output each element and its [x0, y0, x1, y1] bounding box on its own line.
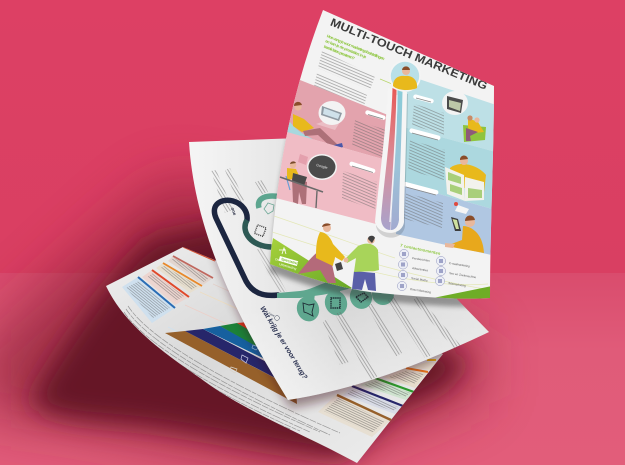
- small step label: Fase: [268, 311, 276, 318]
- right man: [344, 236, 379, 291]
- contact moments list: E-mailmarketing: [449, 261, 470, 268]
- thermometer: inner bore: [390, 95, 397, 222]
- logo: De: [275, 257, 280, 262]
- contact moments list: Persberichten: [412, 256, 430, 263]
- icon: person with tablet: [445, 215, 484, 253]
- lobe icons: [303, 293, 368, 316]
- logo: [275, 248, 299, 271]
- shadow under papers: [0, 180, 480, 465]
- intro heading: en kan je de prestaties in je: [325, 38, 368, 60]
- pyramid chart: [165, 322, 297, 404]
- callout: rose: [168, 256, 213, 285]
- panel text: [404, 193, 443, 228]
- text columns beside the route: [211, 168, 268, 213]
- illustration: handshake: [298, 223, 379, 291]
- portrait badge: [389, 60, 421, 92]
- intro heading: Hoe vang je voor marketingdoelstellingen: [326, 33, 386, 61]
- left man: [298, 223, 345, 283]
- bubble: laptop screen: [316, 101, 346, 130]
- pill label: [349, 161, 376, 174]
- panel text: [412, 104, 444, 135]
- callout: brown: [318, 394, 391, 437]
- panel text: [342, 171, 377, 210]
- paper: middle sheet shadow: [210, 258, 443, 414]
- panel: blue 2: [400, 127, 496, 210]
- contact moments list: [397, 249, 477, 294]
- route line: navy: [214, 200, 278, 295]
- route line: dark teal: [245, 220, 272, 247]
- decorative curves in lower panel: [272, 216, 490, 290]
- lobe 2: [324, 292, 348, 316]
- contact moments list: Social Media: [411, 276, 428, 283]
- heading: what do you get: Wat krijg je er voor terug?: [258, 305, 309, 381]
- contact moments heading: 7 contactmomenten: [400, 243, 441, 256]
- route line: teal arc: [258, 196, 282, 208]
- lobe 3: [350, 289, 372, 309]
- sheet edge accent: [183, 247, 215, 261]
- bubble: search: Google: [316, 163, 328, 170]
- connector lines: [168, 284, 237, 332]
- panel text: [408, 140, 445, 180]
- paper: top sheet: [268, 10, 496, 300]
- thermometer: warm scale: [381, 88, 396, 230]
- panel: pink 1: [287, 80, 386, 159]
- callout: orange: [156, 263, 202, 293]
- pill label: [409, 128, 441, 141]
- intro heading: bereik laten presteren?: [323, 44, 356, 61]
- icon: couple on sofa: [463, 115, 486, 142]
- callout: green: [360, 378, 414, 400]
- lobe 4: [372, 292, 394, 305]
- body text block: [122, 306, 340, 435]
- panel: blue 1: [404, 74, 496, 152]
- icon: person reading newspaper: [445, 155, 486, 201]
- paper: top sheet shadow: [268, 138, 466, 310]
- panel: pink 2: [268, 130, 386, 224]
- contact moments list: Seo en Zoekmachine: [449, 271, 477, 279]
- pill label: [365, 110, 386, 120]
- bubble: video grid: [442, 91, 468, 115]
- contact moments list: Advertenties: [412, 266, 429, 273]
- icon: person on sofa with laptop: [288, 102, 343, 148]
- contact moments list: Telemarketing: [448, 281, 467, 288]
- small step label: [268, 311, 279, 320]
- pill label: [403, 181, 439, 195]
- callout: blue: [122, 277, 175, 323]
- panel text: [352, 120, 386, 158]
- text columns below lobes: [256, 247, 462, 380]
- callout: red: [142, 270, 189, 305]
- pill label: [413, 94, 434, 104]
- teal route with lobes: [277, 282, 394, 322]
- callout: navy: [343, 386, 403, 414]
- paper: middle sheet: [189, 138, 489, 400]
- icon: envelope with notification: [454, 202, 469, 214]
- title: MULTI-TOUCH MARKETING: [328, 17, 489, 93]
- green corner left: [268, 238, 352, 292]
- contact moments list: Direct Marketing: [410, 287, 432, 294]
- panel: periwinkle: [396, 181, 496, 256]
- route icons: [255, 203, 274, 236]
- logo: Uitbesteding: [279, 262, 297, 271]
- step label: one: [230, 207, 237, 216]
- intro text: [314, 52, 392, 104]
- thermometer: [375, 60, 421, 238]
- logo: Specialist: [281, 257, 299, 266]
- green corner right: [433, 286, 492, 300]
- thermometer: cool scale: [391, 90, 402, 230]
- icon: person at desk: [280, 161, 323, 208]
- lobe 1: [296, 297, 320, 322]
- paper: bottom sheet: [106, 247, 443, 463]
- callout: amber: [383, 360, 436, 388]
